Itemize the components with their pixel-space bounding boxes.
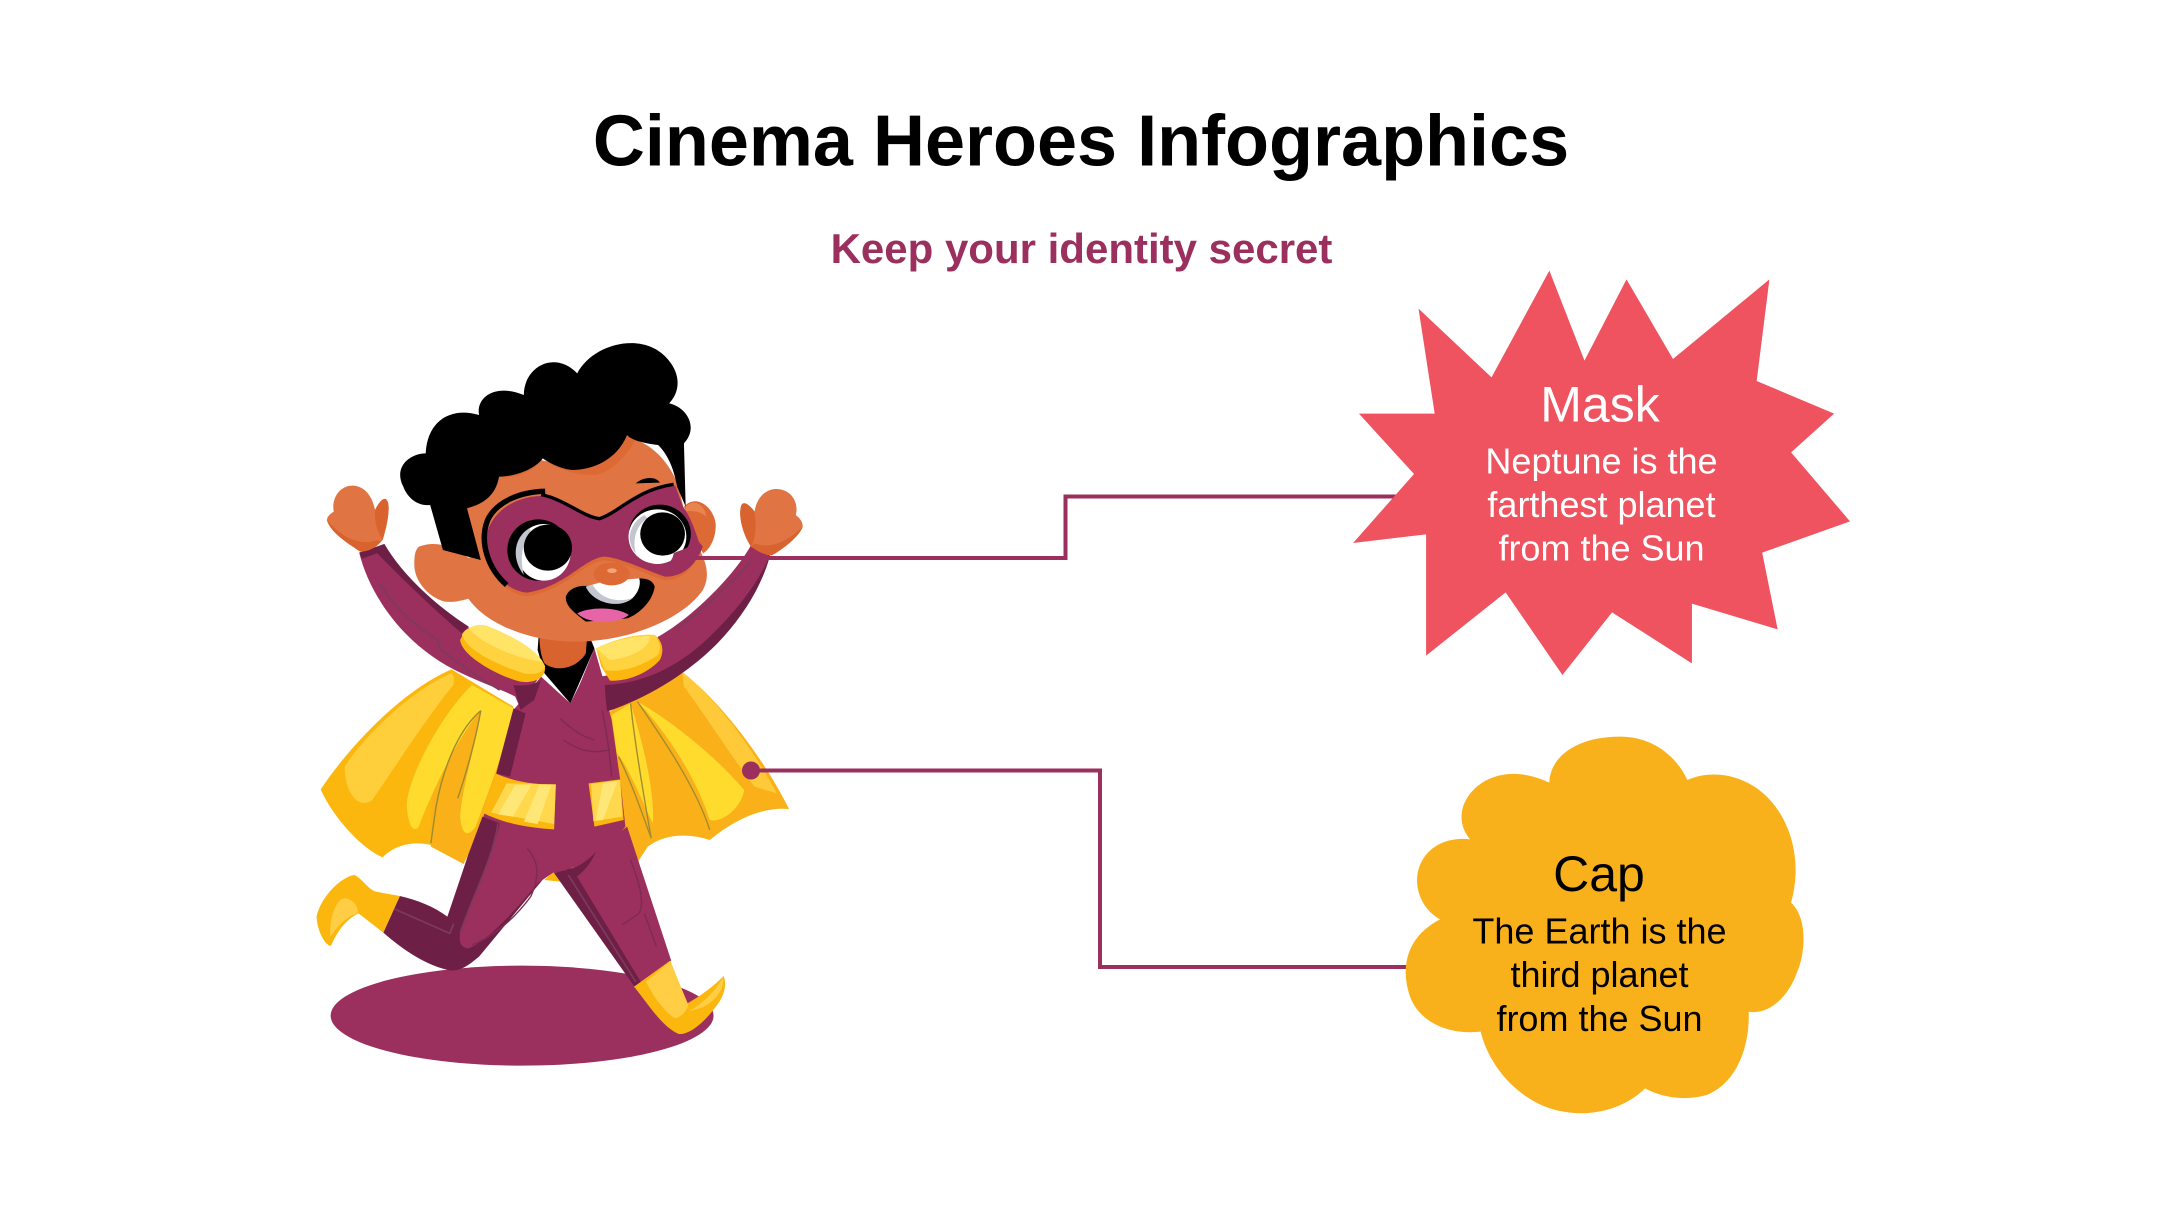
title: Cinema Heroes Infographics [593,102,1569,182]
starburst shape [1353,271,1850,675]
left ear [414,544,486,602]
right arm [600,545,770,712]
right ear [684,501,716,553]
callout: Cap [1406,737,1804,1113]
neck and collar [460,625,662,712]
torso [448,655,625,945]
illustration: superhero character [317,343,803,1066]
Mask description: Neptune is the [1485,440,1718,482]
Mask heading: Mask [1540,376,1661,432]
mouth [566,578,655,622]
Cap description: The Earth is the [1472,910,1727,952]
left hand [327,486,389,552]
left arm [359,544,541,710]
right eye [629,505,703,577]
connector: hero mask to Mask callout [675,496,1420,558]
callout: Mask [1353,271,1850,675]
hero lower body: cape, shadow, legs, torso [317,655,789,1066]
Cap heading: Cap [1553,846,1645,902]
cape [321,669,789,882]
Mask description [1485,440,1718,568]
Cap description: from the Sun [1496,998,1703,1039]
cloud shape [1406,737,1804,1113]
Mask description: farthest planet [1487,484,1716,525]
left boot [317,875,400,946]
hair [400,343,691,560]
right hand [740,489,803,555]
subtitle: Keep your identity secret [831,225,1332,272]
belt [483,773,624,829]
right boot [634,961,725,1034]
Cap description [1472,910,1727,1039]
face [465,435,707,642]
front leg [553,827,671,986]
ground shadow [331,966,714,1066]
Cap description: third planet [1510,954,1689,995]
mask [484,478,699,593]
left eye [507,519,572,581]
hero upper body: arms and head [327,343,803,712]
Mask description: from the Sun [1498,528,1705,568]
nose [594,563,630,585]
connector: hero cape to Cap callout [742,762,1410,967]
back leg [383,820,610,971]
